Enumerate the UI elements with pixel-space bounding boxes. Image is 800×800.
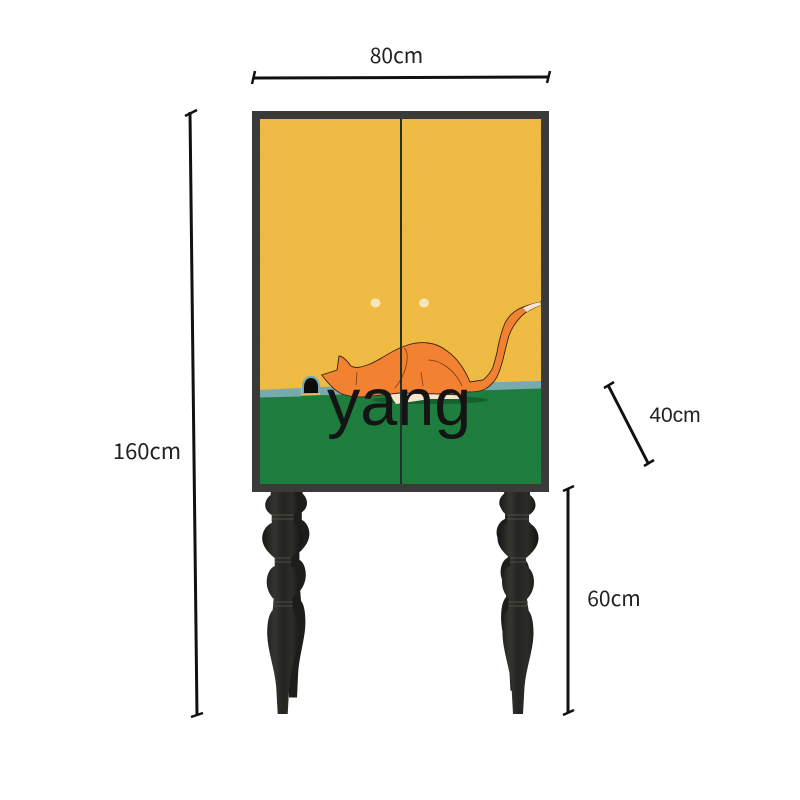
dimension: width 80cm xyxy=(252,40,550,84)
dimension: height 160cm: 160cm xyxy=(113,434,181,466)
cabinet xyxy=(252,111,549,492)
dimension: depth 40cm: 40cm xyxy=(649,404,701,427)
back legs xyxy=(277,491,533,697)
dimension: width 80cm: 80cm xyxy=(370,40,423,70)
mouse hole xyxy=(302,376,320,394)
front left leg xyxy=(262,492,303,714)
blue baseboard xyxy=(260,381,541,398)
yellow wall xyxy=(260,119,541,397)
dimension: height 160cm xyxy=(113,110,203,717)
green floor xyxy=(260,388,541,484)
watermark: yang: yang xyxy=(327,366,471,440)
dimension: leg height 60cm: 60cm xyxy=(587,583,641,613)
dimension: depth 40cm xyxy=(604,382,701,466)
cat shadow xyxy=(372,396,488,404)
paint grain xyxy=(260,119,541,484)
dimension: leg height 60cm xyxy=(563,486,641,715)
right door knob xyxy=(419,298,429,308)
cabinet frame xyxy=(252,111,549,492)
front right leg xyxy=(498,492,538,714)
left door knob xyxy=(370,298,380,308)
door split xyxy=(400,119,402,484)
cat xyxy=(322,302,541,404)
